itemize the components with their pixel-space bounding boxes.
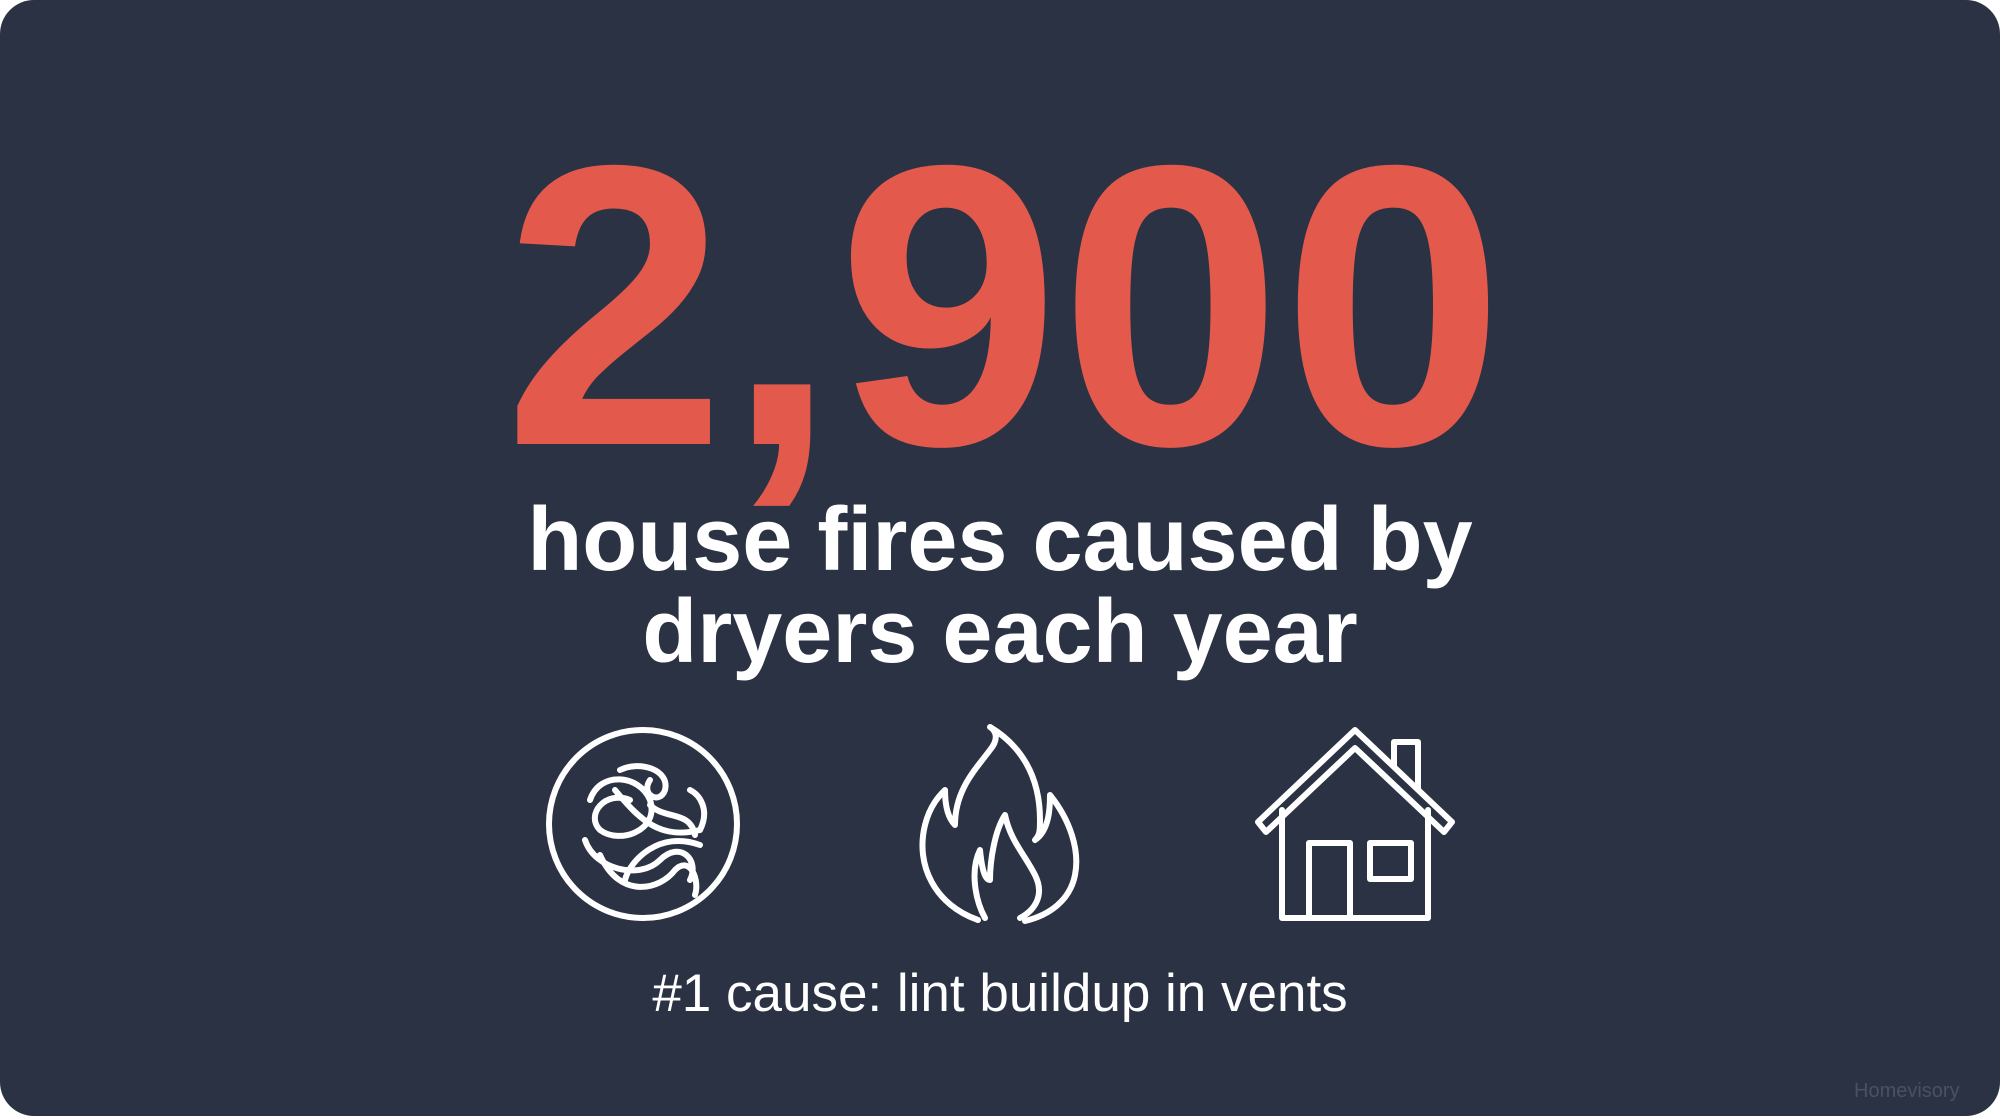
watermark: Homevisory (1854, 1080, 1960, 1102)
big number: 2,900 (504, 82, 1504, 529)
icon: house (1258, 730, 1452, 918)
icon: lint circle (549, 730, 737, 918)
subtitle: dryers each year (642, 582, 1358, 682)
icon: flame (922, 727, 1076, 921)
subtitle (527, 490, 1473, 682)
subtitle: house fires caused by (527, 490, 1473, 590)
caption: #1 cause: lint buildup in vents (652, 964, 1348, 1023)
